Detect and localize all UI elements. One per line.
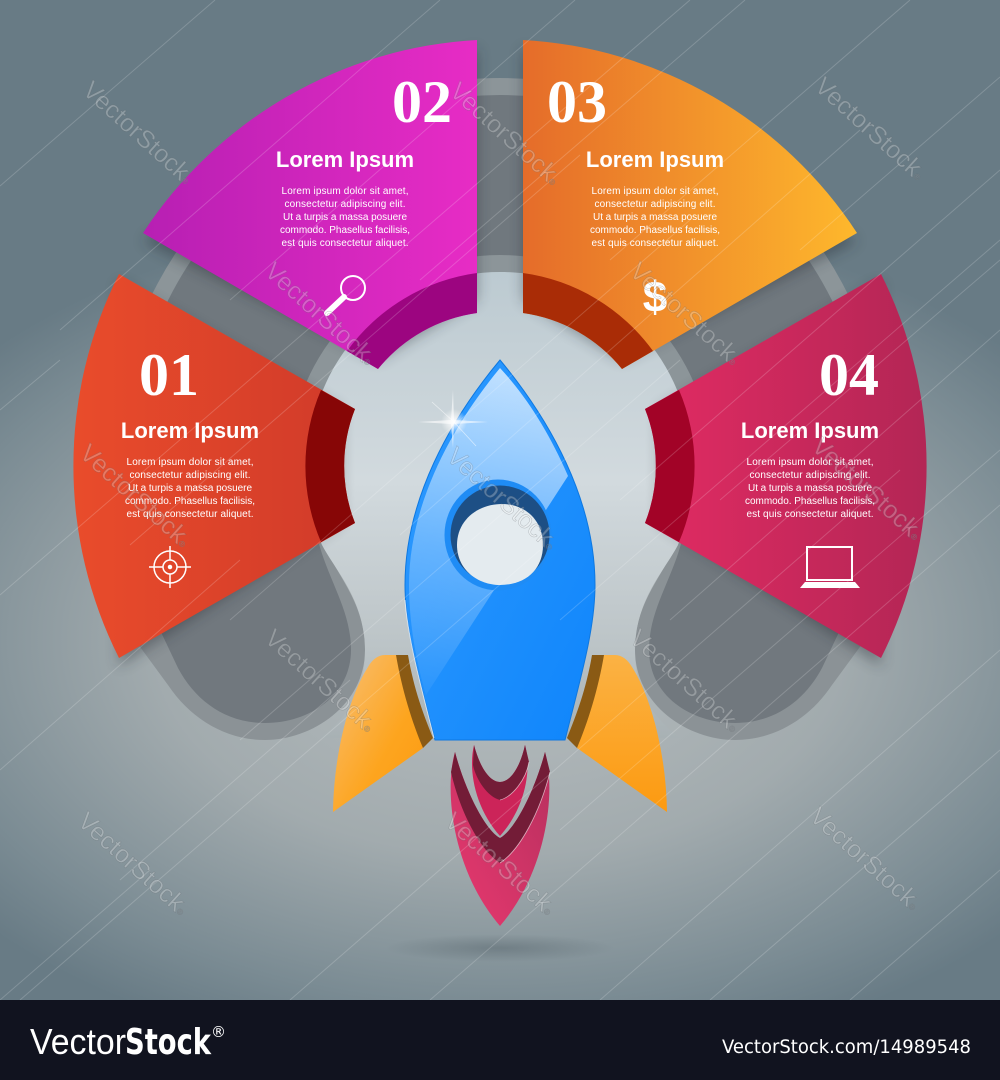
watermarks: ® xyxy=(907,902,917,912)
body text 01: Lorem ipsum dolor sit amet, xyxy=(126,457,254,468)
panel 04 shape xyxy=(645,274,927,658)
watermarks: ® xyxy=(544,542,554,552)
number 03: 03 xyxy=(547,69,607,135)
inner flame xyxy=(472,745,528,836)
lower left lobe xyxy=(135,540,365,740)
body text 03: est quis consectetur aliquet. xyxy=(592,238,718,249)
watermarks: VectorStock xyxy=(624,257,742,367)
body text 03: consectetur adipiscing elit. xyxy=(594,199,716,210)
watermarks: ® xyxy=(362,357,372,367)
panel 03 shape xyxy=(523,40,857,369)
body text 02: consectetur adipiscing elit. xyxy=(284,199,406,210)
icon: dollar: $ xyxy=(643,273,667,322)
footer url: VectorStock.com/14989548 xyxy=(722,1036,971,1058)
watermarks: ® xyxy=(727,724,737,734)
heading 03: Lorem Ipsum xyxy=(586,147,724,172)
watermarks: VectorStock xyxy=(804,802,922,912)
heading 04: Lorem Ipsum xyxy=(741,418,879,443)
body text 01 xyxy=(125,457,255,520)
watermarks: VectorStock xyxy=(77,76,195,186)
watermarks: VectorStock xyxy=(259,624,377,734)
footer bar xyxy=(0,1000,1000,1080)
left fin xyxy=(333,655,433,812)
watermarks: VectorStock xyxy=(72,807,190,917)
watermarks: VectorStock xyxy=(806,432,924,542)
watermarks: ® xyxy=(727,357,737,367)
panel 02 xyxy=(143,40,477,369)
ground shadow xyxy=(385,934,615,962)
watermarks: VectorStock xyxy=(74,439,192,549)
footer logo: Vector xyxy=(30,1021,126,1062)
lower right lobe xyxy=(635,540,865,740)
number 04: 04 xyxy=(819,342,879,408)
icon: magnifier xyxy=(327,276,365,313)
panel 02 shape xyxy=(143,40,477,369)
body text 02 xyxy=(280,186,410,249)
body text 02: commodo. Phasellus facilisis, xyxy=(280,225,410,236)
icon: target xyxy=(149,546,191,588)
footer logo: Stock xyxy=(125,1022,212,1063)
panel 04 xyxy=(645,274,927,658)
upper grey ring xyxy=(152,78,848,390)
heading 01: Lorem Ipsum xyxy=(121,418,259,443)
rocket body xyxy=(405,360,595,740)
watermarks: VectorStock xyxy=(444,77,562,187)
body text 01: commodo. Phasellus facilisis, xyxy=(125,496,255,507)
watermarks: VectorStock xyxy=(624,624,742,734)
watermarks: ® xyxy=(177,539,187,549)
porthole xyxy=(444,480,552,590)
watermarks: VectorStock xyxy=(259,257,377,367)
flame edge highlights xyxy=(500,762,550,863)
body text 03: Ut a turpis a massa posuere xyxy=(593,212,717,223)
body text 04: est quis consectetur aliquet. xyxy=(746,509,874,520)
watermarks: VectorStock xyxy=(809,72,927,182)
panel 01 inner band xyxy=(305,390,355,542)
sparkle xyxy=(418,390,488,448)
lower left edge highlight xyxy=(405,600,434,738)
watermarks: VectorStock xyxy=(439,807,557,917)
body text 03: commodo. Phasellus facilisis, xyxy=(590,225,720,236)
panel 04 inner band xyxy=(645,390,695,542)
watermarks: ® xyxy=(909,532,919,542)
outer flame xyxy=(451,752,549,926)
panel 02 inner band xyxy=(347,273,477,369)
glass highlight xyxy=(409,368,568,695)
watermarks: ® xyxy=(180,176,190,186)
body text 01: Ut a turpis a massa posuere xyxy=(128,483,252,494)
panel 03 xyxy=(523,40,857,369)
heading 02: Lorem Ipsum xyxy=(276,147,414,172)
body text 04 xyxy=(745,457,875,520)
watermarks xyxy=(72,72,932,921)
body text 01: consectetur adipiscing elit. xyxy=(130,470,250,481)
body text 04: commodo. Phasellus facilisis, xyxy=(745,496,875,507)
footer logo: ® xyxy=(211,1023,226,1041)
watermarks: ® xyxy=(547,177,557,187)
watermarks: ® xyxy=(175,907,185,917)
panel shadows xyxy=(119,48,881,666)
body text 04: Lorem ipsum dolor sit amet, xyxy=(746,457,874,468)
panel 01 shape xyxy=(73,274,355,658)
watermarks: ® xyxy=(362,724,372,734)
footer logo xyxy=(30,1021,226,1063)
watermarks: VectorStock xyxy=(441,442,559,552)
panel 03 inner band xyxy=(523,273,653,369)
rocket xyxy=(333,360,667,962)
body text 04: Ut a turpis a massa posuere xyxy=(748,483,872,494)
right fin xyxy=(567,655,667,812)
grey backdrop behind panels xyxy=(140,78,860,740)
light core xyxy=(308,272,692,738)
watermarks: ® xyxy=(542,907,552,917)
watermarks: ® xyxy=(912,172,922,182)
body text 04: consectetur adipiscing elit. xyxy=(750,470,870,481)
panel 01 xyxy=(73,274,355,658)
flame xyxy=(451,745,550,926)
body text 01: est quis consectetur aliquet. xyxy=(126,509,254,520)
number 02: 02 xyxy=(392,69,452,135)
body text 02: est quis consectetur aliquet. xyxy=(282,238,408,249)
body text 02: Lorem ipsum dolor sit amet, xyxy=(282,186,408,197)
body text 03 xyxy=(590,186,720,249)
body text 03: Lorem ipsum dolor sit amet, xyxy=(592,186,718,197)
body text 02: Ut a turpis a massa posuere xyxy=(283,212,407,223)
icon: laptop xyxy=(800,547,860,588)
number 01: 01 xyxy=(139,342,199,408)
